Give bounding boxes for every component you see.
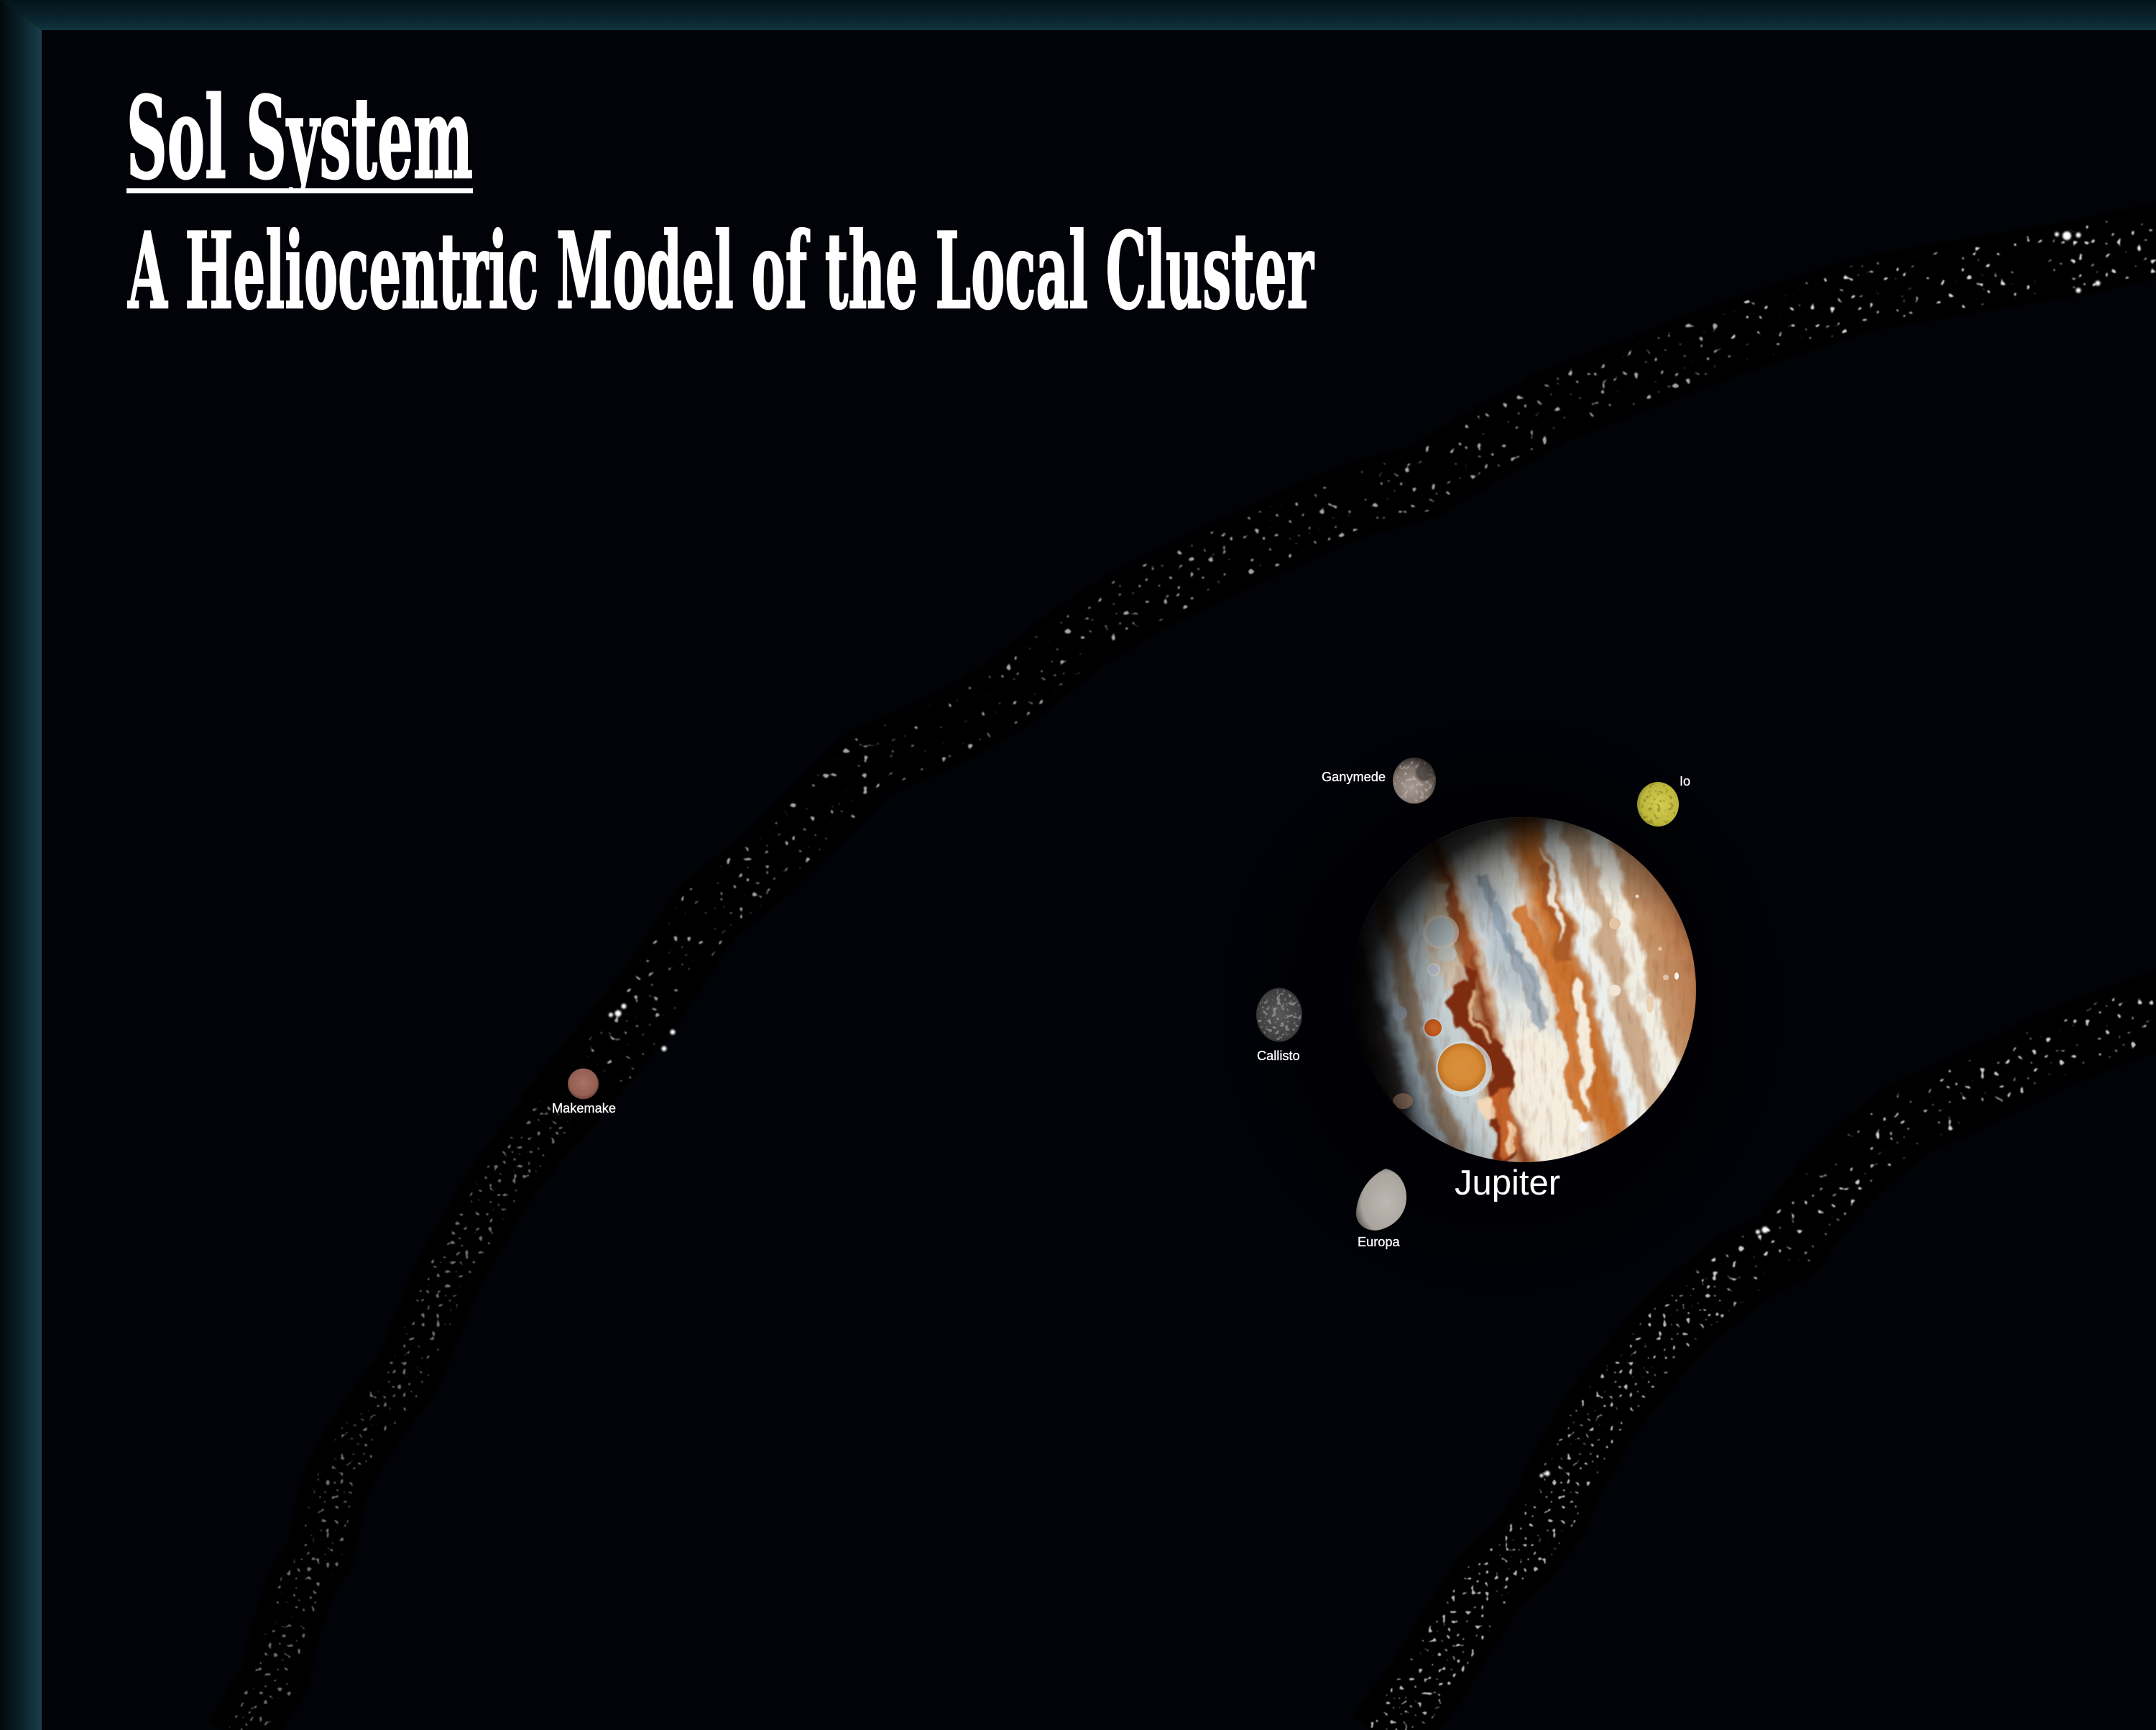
title (126, 91, 1315, 310)
moon: Callisto: Callisto (1257, 1049, 1300, 1063)
terminator shading (1350, 816, 1697, 1163)
planet: Jupiter (1353, 817, 1696, 1202)
great red spot (1437, 1044, 1486, 1091)
fine streak texture (1389, 835, 1696, 1161)
heading: Sol System (126, 91, 473, 193)
moon: Ganymede (1322, 758, 1436, 804)
ovals and storms (1393, 894, 1679, 1131)
dwarf planet: Makemake: Makemake (552, 1101, 616, 1115)
bright star clusters (609, 231, 2100, 1051)
moon: Europa (1356, 1169, 1406, 1249)
moon: Europa: Europa (1358, 1235, 1401, 1249)
moon: Io: Io (1680, 774, 1690, 788)
asteroid belt: outer band (237, 231, 2156, 1730)
label: Jupiter: Jupiter (1455, 1164, 1560, 1202)
dark halo behind Jupiter system (1258, 755, 1746, 1258)
moon: Io (1637, 774, 1690, 827)
cloud bands (1354, 817, 1696, 1162)
small red spot (1423, 1018, 1443, 1038)
heading: Sol System: Sol System (126, 73, 473, 205)
dwarf planet: Makemake (552, 1068, 616, 1115)
moon: Callisto (1256, 988, 1302, 1063)
asteroid belt: inner band (1383, 1006, 2156, 1730)
bright star cluster (1539, 1226, 1768, 1478)
moon: Ganymede: Ganymede (1322, 770, 1386, 784)
